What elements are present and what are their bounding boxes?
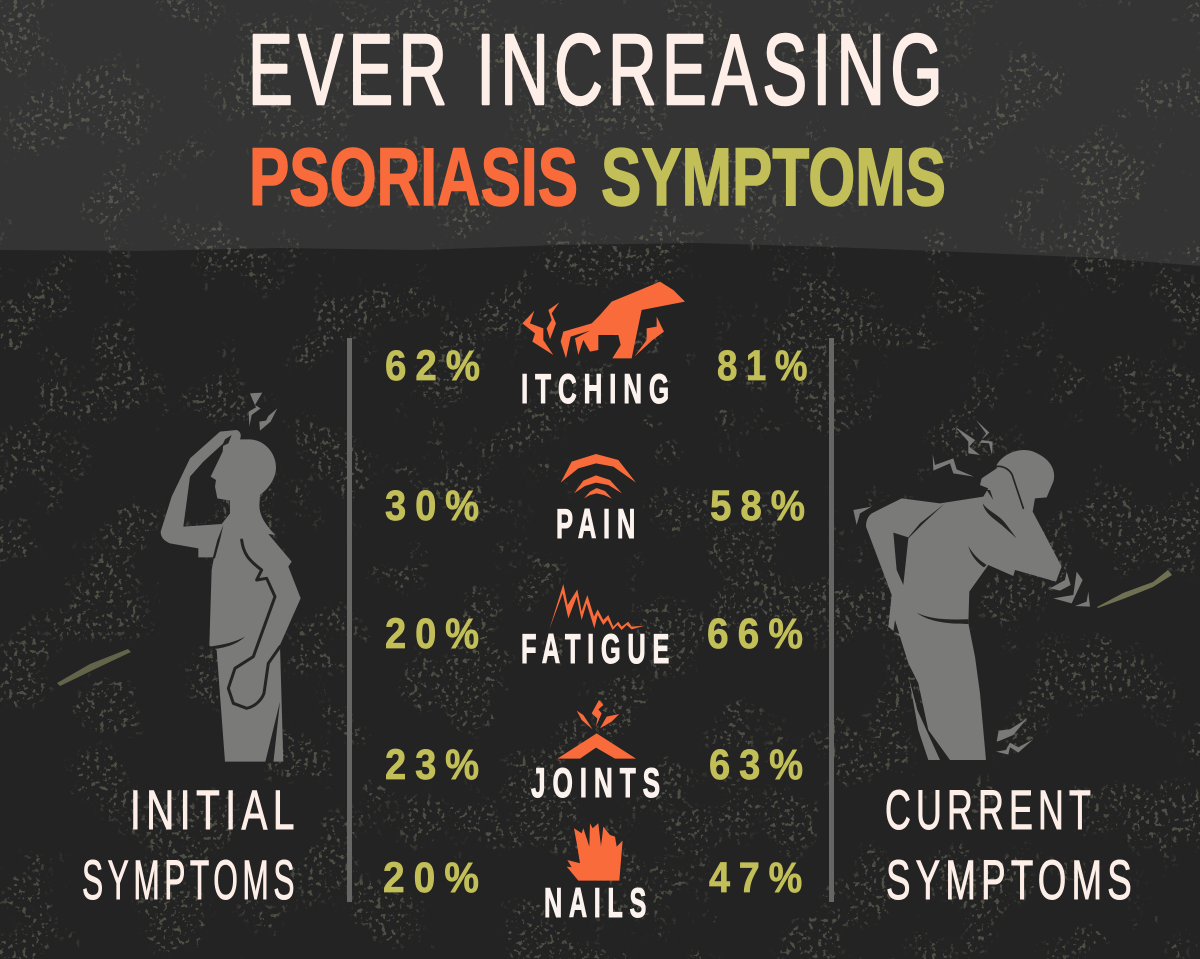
silhouette bbox=[161, 430, 301, 762]
current percent: 66% bbox=[707, 610, 812, 658]
word: symptoms: SYMPTOMS bbox=[82, 848, 299, 911]
title word: psoriasis: PSORIASIS bbox=[249, 132, 578, 223]
label: PAIN bbox=[556, 500, 642, 547]
row: pain bbox=[385, 454, 814, 547]
label: current symptoms bbox=[885, 778, 1137, 911]
olive brush stroke right bbox=[1097, 570, 1172, 608]
icon: pain arcs bbox=[561, 454, 636, 499]
initial percent: 23% bbox=[385, 741, 488, 789]
clothing lines bbox=[917, 613, 968, 624]
initial percent: 62% bbox=[385, 342, 489, 390]
left divider bbox=[347, 338, 352, 902]
word: initial: INITIAL bbox=[130, 778, 300, 841]
icon: aching joint bbox=[557, 700, 636, 759]
icon: scratching hand bbox=[522, 282, 685, 358]
label: ITCHING bbox=[521, 365, 676, 412]
row: itching bbox=[385, 282, 816, 412]
label: initial symptoms bbox=[82, 778, 300, 911]
silhouette bbox=[866, 450, 1062, 760]
current percent: 63% bbox=[709, 741, 812, 789]
row: joints bbox=[385, 700, 812, 806]
initial percent: 30% bbox=[385, 482, 488, 530]
icon: fading pulse bbox=[549, 584, 645, 630]
pain bolts and motion marks bbox=[853, 420, 1090, 755]
figure: current symptoms bbox=[853, 420, 1090, 760]
right divider bbox=[829, 338, 834, 902]
label: JOINTS bbox=[531, 759, 667, 806]
rear leg bbox=[909, 678, 940, 760]
current percent: 47% bbox=[709, 854, 811, 902]
initial percent: 20% bbox=[383, 854, 488, 902]
initial percent: 20% bbox=[385, 610, 488, 658]
current percent: 58% bbox=[710, 482, 814, 530]
pain bolts bbox=[249, 393, 277, 431]
row: nails bbox=[383, 823, 811, 926]
icon: hand with damaged nails bbox=[567, 823, 623, 881]
label: NAILS bbox=[544, 879, 653, 926]
header band bbox=[0, 0, 1200, 266]
clothing and arm lines bbox=[228, 540, 280, 708]
current percent: 81% bbox=[717, 342, 816, 390]
olive brush stroke left bbox=[57, 649, 131, 686]
row: fatigue bbox=[385, 584, 812, 672]
title word: symptoms: SYMPTOMS bbox=[601, 132, 946, 223]
label: FATIGUE bbox=[521, 625, 676, 672]
title bbox=[248, 14, 948, 223]
figure: initial symptoms bbox=[161, 393, 301, 763]
